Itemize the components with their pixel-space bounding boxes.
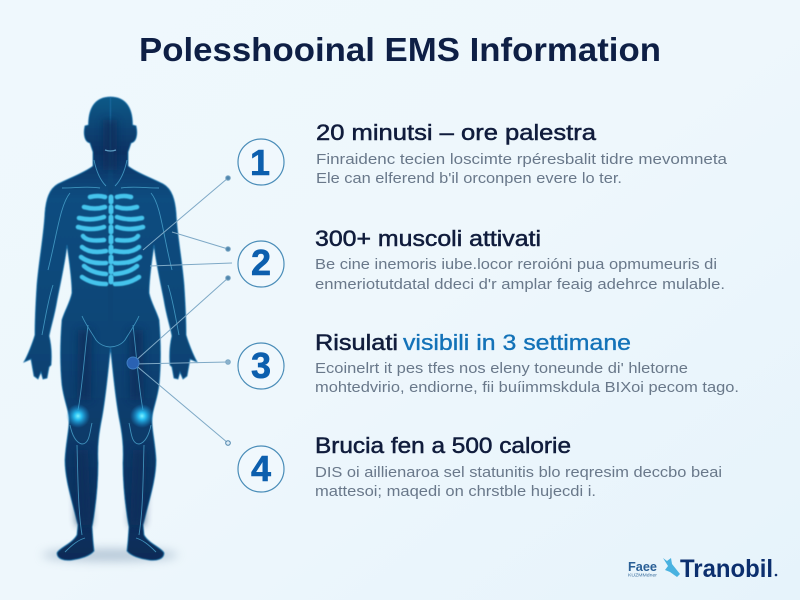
number badge 3 — [238, 343, 284, 389]
ribcage — [78, 196, 143, 286]
muscle lines — [42, 160, 179, 552]
logo: Faee — [628, 559, 657, 574]
text block 1: Finraidenc tecien loscimte rpéresbalit tidre mevomneta — [316, 151, 728, 168]
text block 2 — [315, 226, 725, 293]
number badge 1: 1 — [250, 142, 270, 183]
text block 4: Brucia fen a 500 calorie — [315, 433, 571, 458]
logo: Tranobil — [680, 555, 773, 583]
number badge 4: 4 — [251, 448, 271, 489]
body silhouette — [24, 97, 197, 560]
text block 3: visibili in 3 settimane — [403, 330, 631, 355]
floor shadow — [42, 549, 178, 561]
icon: logo bird — [663, 558, 680, 577]
text block 2: Be cine inemoris iube.locor reroióni pua opmumeuris di — [315, 256, 717, 273]
text block 1: 20 minutsi – ore palestra — [316, 120, 597, 145]
number badge 2: 2 — [251, 242, 271, 283]
text block 3: Risulati — [315, 330, 398, 355]
number badge 2 — [238, 241, 284, 287]
text block 3: Ecoinelrt it pes tfes nos eleny toneunde di' hletorne — [315, 360, 688, 377]
text block 2: 300+ muscoli attivati — [315, 226, 541, 251]
connector lines — [127, 176, 232, 445]
logo: KUZMMdner — [628, 572, 658, 578]
knee glow points — [66, 404, 90, 428]
text block 4: mattesoi; maqedi on chrstble hujecdi i. — [315, 483, 596, 500]
title: Polesshooinal EMS Information — [139, 31, 661, 68]
number badge 1 — [238, 139, 284, 185]
text block 4: DIS oi aillienaroa sel statunitis blo reqresim deccbo beai — [315, 464, 722, 481]
number badge 4 — [238, 446, 284, 492]
human body figure — [24, 97, 197, 561]
logo — [628, 555, 777, 583]
thigh and calf shading — [81, 120, 140, 525]
mouth — [105, 150, 116, 151]
text block 1: Ele can elferend b'il orconpen evere lo ter. — [316, 170, 622, 187]
text block 2: enmeriotutdatal ddeci d'r amplar feaig adehrce mulable. — [315, 276, 725, 293]
number badge 3: 3 — [251, 345, 271, 386]
text block 1 — [316, 120, 728, 187]
text block 3: mohtedvirio, endiorne, fii buíimmskdula BIXoi pecom tago. — [315, 379, 739, 396]
text block 3 — [315, 330, 739, 396]
text block 4 — [315, 433, 722, 500]
